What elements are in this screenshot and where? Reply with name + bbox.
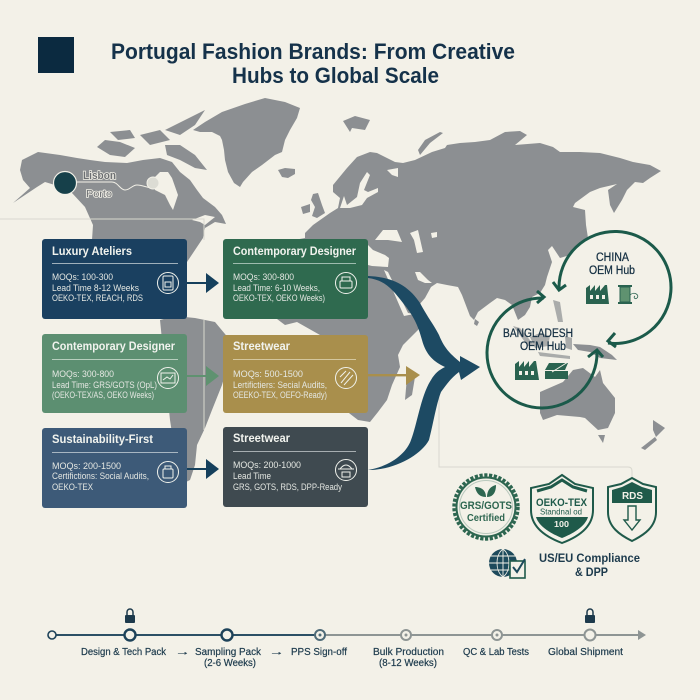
icon: lock design stage [125, 609, 135, 623]
panel: Contemporary Designer left: Lead Time: GRS/GOTS (OpL) [52, 380, 157, 390]
panel: Luxury Ateliers [42, 239, 187, 319]
panel: Luxury Ateliers: Lead Time 8-12 Weeks [52, 283, 139, 293]
panel: Sustainability-First: Sustainability-First [52, 432, 153, 446]
China OEM hub: CHINA [596, 252, 629, 264]
panel: Luxury Ateliers: OEKO-TEX, REACH, RDS [52, 293, 143, 303]
icon: globe with checkbox [489, 549, 525, 578]
connector line: hub to certifications [439, 370, 632, 478]
panel: Streetwear dark: MOQs: 200-1000 [233, 460, 301, 470]
panel: Streetwear gold: MOQs: 500-1500 [233, 369, 303, 379]
icon: eco bag [158, 462, 178, 482]
timeline nodes [48, 630, 596, 640]
world map [13, 98, 665, 485]
origin marker: Lisbon and Porto [54, 170, 159, 200]
icon: sewing box [336, 272, 356, 294]
arrow: luxury to contemporary [187, 273, 219, 293]
panel: Streetwear gold: Streetwear [233, 339, 290, 353]
icon: cap [336, 460, 356, 480]
timeline labels: Global Shipment [548, 647, 623, 658]
panel: Luxury Ateliers: Luxury Ateliers [52, 244, 132, 258]
badge: GRS/GOTS Certified [454, 475, 518, 539]
timeline labels: (2-6 Weeks) [204, 658, 256, 669]
title: Hubs to Global Scale [232, 63, 439, 88]
origin marker: Lisbon and Porto: Porto [86, 188, 112, 200]
arrow: flow swoosh converging toward OEM hubs [368, 276, 480, 470]
arrow: sustainability to streetwear [187, 459, 219, 479]
panel: Streetwear dark: GRS, GOTS, RDS, DPP-Ready [233, 482, 342, 492]
origin marker: Lisbon and Porto: Lisbon [83, 170, 116, 182]
panel: Streetwear gold: OEEKO-TEX, OEFO-Ready) [233, 390, 327, 400]
panel: Luxury Ateliers: MOQs: 100-300 [52, 272, 113, 282]
panel: Contemporary Designer left [42, 334, 187, 413]
timeline labels: Sampling Pack [195, 647, 262, 658]
badge: RDS: RDS [622, 491, 643, 502]
icon: factory [586, 285, 609, 304]
panel: Streetwear gold: Lertifictiers: Secial Audits, [233, 380, 327, 390]
badge: GRS/GOTS Certified: Certified [467, 512, 505, 524]
timeline labels: PPS Sign-off [291, 647, 347, 658]
timeline labels [81, 647, 623, 669]
timeline [48, 609, 646, 669]
panel: Contemporary Designer right: Lead Time: 6-10 Weeks, [233, 283, 320, 293]
panel: Sustainability-First: OEKO-TEX [52, 482, 93, 492]
connector line: map guide left [0, 219, 204, 430]
logo square [38, 37, 74, 73]
timeline labels: Bulk Production [373, 647, 444, 658]
panel: Streetwear dark: Lead Time [233, 471, 271, 481]
timeline labels: (8-12 Weeks) [379, 658, 437, 669]
timeline labels: → [269, 647, 284, 658]
panel: Streetwear dark: Streetwear [233, 431, 290, 445]
title [111, 39, 515, 88]
US/EU compliance text: US/EU Compliance [539, 553, 640, 565]
badge: OEKO-TEX Standard 100: 100 [554, 519, 569, 529]
panel: Contemporary Designer right [223, 239, 368, 319]
arrow: timeline end [638, 630, 646, 640]
badge: OEKO-TEX Standard 100: OEKO-TEX [536, 497, 588, 509]
timeline labels: → [175, 647, 190, 658]
panel: Contemporary Designer left: (OEKO-TEX/AS, OEKO Weeks) [52, 390, 154, 400]
arrow: contemporary to streetwear [187, 366, 219, 386]
icon: lock shipment stage [585, 609, 595, 623]
arrow: streetwear gold [368, 366, 420, 385]
panel: Contemporary Designer right: MOQs: 300-800 [233, 272, 294, 282]
panel: Contemporary Designer left: MOQs: 300-800 [52, 369, 114, 379]
badge: GRS/GOTS Certified: GRS/GOTS [460, 500, 512, 512]
panel: Sustainability-First [42, 428, 187, 508]
Bangladesh OEM hub [487, 291, 603, 408]
US/EU compliance text: & DPP [575, 567, 608, 579]
icon: sewing machine [545, 362, 568, 379]
icon: street tag [336, 368, 356, 388]
timeline labels: QC & Lab Tests [463, 647, 529, 658]
Bangladesh OEM hub: OEM Hub [520, 341, 566, 353]
icon: thread spool [618, 286, 638, 303]
panel: Contemporary Designer right: Contemporary Designer [233, 244, 356, 258]
icon: factory [515, 361, 539, 380]
panel: Contemporary Designer right: OEKO-TEX, OEKO Weeks) [233, 293, 325, 303]
US/EU compliance text [539, 553, 640, 579]
badge: RDS [608, 478, 656, 541]
panel: Streetwear gold [223, 335, 368, 413]
badge: OEKO-TEX Standard 100 [531, 475, 593, 543]
panel: Streetwear dark [223, 427, 368, 507]
China OEM hub [553, 231, 671, 347]
icon: down arrow [624, 506, 640, 530]
Bangladesh OEM hub: BANGLADESH [503, 328, 573, 340]
icon: chart screen [158, 368, 178, 388]
panel: Contemporary Designer left: Contemporary Designer [52, 339, 175, 353]
icon: garment tag [158, 272, 178, 294]
China OEM hub: OEM Hub [589, 265, 635, 277]
badge: OEKO-TEX Standard 100: Standnal od [540, 508, 582, 516]
timeline labels: Design & Tech Pack [81, 647, 167, 658]
title: Portugal Fashion Brands: From Creative [111, 39, 515, 64]
panel: Sustainability-First: Certifictions: Social Audits, [52, 471, 149, 481]
panel: Sustainability-First: MOQs: 200-1500 [52, 461, 121, 471]
